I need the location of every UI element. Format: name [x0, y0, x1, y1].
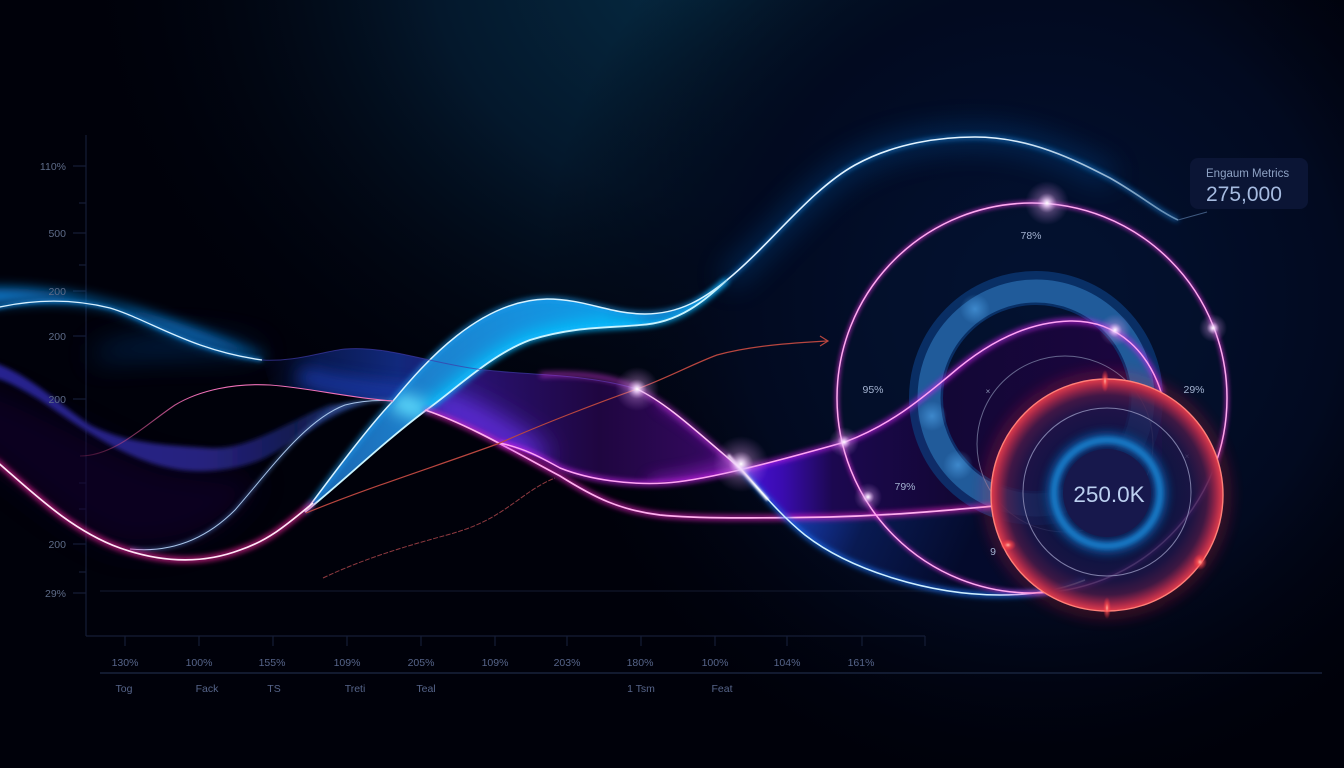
main pink wave [0, 460, 313, 560]
pale grey wave [130, 400, 393, 550]
callout: engagement metrics: Engaum Metrics [1206, 168, 1289, 180]
x axis category labels: 1 Tsm [627, 683, 655, 695]
x axis category labels: Feat [711, 683, 733, 695]
x axis [86, 636, 1322, 673]
callout: engagement metrics [1190, 158, 1308, 209]
y axis labels: 500 [48, 228, 66, 240]
x axis percent labels: 109% [334, 657, 360, 669]
long blue arc to callout [727, 137, 1207, 280]
glow nodes [615, 181, 1227, 511]
purple dome fill [740, 321, 1162, 518]
pink long wave [80, 385, 995, 518]
y axis labels: 200 [48, 331, 66, 343]
purple ribbon [262, 349, 745, 484]
x axis category labels: Teal [416, 683, 436, 695]
y axis labels: 200 [48, 286, 66, 298]
magenta rising line [500, 321, 1162, 483]
x axis percent labels: 205% [408, 657, 434, 669]
left indigo band [0, 363, 370, 548]
big pink ring [837, 203, 1227, 593]
ring percent labels: 29% [1183, 384, 1205, 396]
x axis category labels: Treti [345, 683, 365, 695]
top left blue wave glow [0, 288, 270, 360]
ring percent labels [862, 230, 1205, 558]
lower blue fill [785, 508, 1110, 595]
x axis percent labels [112, 657, 874, 669]
red gauge circle [990, 370, 1224, 619]
x axis category labels [116, 683, 733, 695]
thin inner circle: × [986, 387, 991, 396]
gauge blue glow ring [1053, 439, 1161, 547]
top left blue line [0, 301, 637, 389]
large circle interior [837, 203, 1227, 593]
x axis percent labels: 155% [259, 657, 285, 669]
gauge value: 250.0K [1073, 482, 1145, 507]
ring percent labels: 78% [1020, 230, 1042, 242]
red trend arrow [306, 336, 828, 513]
y axis labels: 200 [48, 539, 66, 551]
x axis category labels: Fack [196, 683, 219, 695]
blue ribbon [310, 294, 710, 506]
gauge thin ring [1023, 408, 1191, 576]
x axis category labels: TS [267, 683, 281, 695]
ring percent labels: 79% [894, 481, 916, 493]
x axis percent labels: 100% [702, 657, 728, 669]
blue donut ring [917, 288, 1146, 508]
x axis percent labels: 109% [482, 657, 508, 669]
gauge ticks [1000, 370, 1207, 619]
purple-to-blue descending line [540, 374, 1085, 595]
x axis percent labels: 203% [554, 657, 580, 669]
y axis labels: 29% [45, 588, 66, 600]
y axis labels: 200 [48, 394, 66, 406]
callout: engagement metrics: 275,000 [1206, 183, 1282, 206]
thin inner circle [977, 356, 1190, 532]
y axis labels [40, 161, 66, 600]
y axis labels: 110% [40, 161, 66, 173]
thin inner circle: × [1185, 452, 1190, 461]
x axis percent labels: 100% [186, 657, 212, 669]
y axis [73, 135, 1000, 636]
ring percent labels: 95% [862, 384, 884, 396]
red dashed projection [323, 478, 555, 578]
x axis percent labels: 161% [848, 657, 874, 669]
x axis category labels: Tog [116, 683, 133, 695]
x axis percent labels: 104% [774, 657, 800, 669]
blue ribbon edge lines [305, 280, 727, 512]
x axis percent labels: 130% [112, 657, 138, 669]
ring percent labels: 9 [990, 546, 996, 558]
x axis percent labels: 180% [627, 657, 653, 669]
